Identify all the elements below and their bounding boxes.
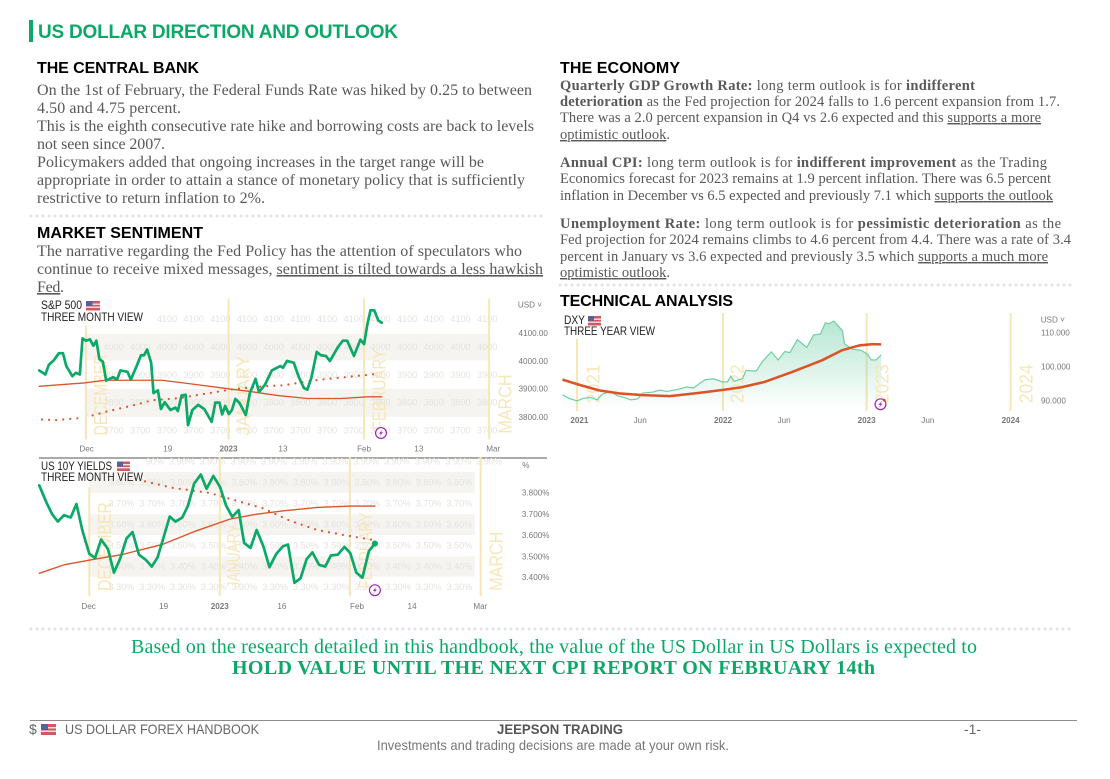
chart: US 10Y yields three month view: MARCH xyxy=(487,532,508,591)
text block: central bank xyxy=(37,82,534,207)
chart: S&P 500 three month view: Dec xyxy=(79,445,94,454)
chart: US 10Y yields three month view: Feb xyxy=(350,602,364,611)
chart: US 10Y yields three month view: 3.70% 3.70% 3.70% 3.70% 3.70% 3.70% 3.70% 3.70% 3.70% 3.70% 3.70% 3.70% xyxy=(109,498,472,508)
text block: quarterly GDP growth rate: optimistic outlook. xyxy=(560,127,670,143)
chart: US 10Y yields three month view: 16 xyxy=(277,602,287,611)
text block: unemployment rate: optimistic outlook. xyxy=(560,265,670,281)
callout: conclusion xyxy=(131,636,977,679)
label: S&P 500 three month view: THREE MONTH VIEW xyxy=(41,310,144,324)
chart: DXY three year view: 2024 xyxy=(1016,364,1037,403)
chart: S&P 500 three month view: 2023 xyxy=(220,445,238,454)
text block: central bank: Policymakers added that ongoing increases in the target range will be xyxy=(37,154,484,171)
label: US 10Y yields three month view: THREE MONTH VIEW xyxy=(41,470,144,484)
footer: $ xyxy=(29,721,37,737)
text block: central bank: restrictive to return inflation to 2%. xyxy=(37,190,265,207)
footer: -1- xyxy=(964,721,981,737)
text block: market sentiment xyxy=(37,243,543,296)
chart: US 10Y yields three month view: 3.400% xyxy=(522,573,549,582)
heading: market sentiment: MARKET SENTIMENT xyxy=(37,225,203,242)
text block: central bank: not seen since 2007. xyxy=(37,136,165,153)
chart: S&P 500 three month view: Feb xyxy=(357,445,372,454)
chart: US 10Y yields three month view: 90% 3.90% 3.90% 3.90% 3.90% 3.90% 3.90% 3.90% 3.90% 3.90% 3.90% 3.90% xyxy=(146,456,502,466)
chart: S&P 500 three month view: Mar xyxy=(486,445,500,454)
heading: the central bank: THE CENTRAL BANK xyxy=(37,60,199,77)
panel: market sentiment xyxy=(37,225,543,296)
panel: the economy xyxy=(560,60,1072,281)
chart: S&P 500 three month view: USD ˅ xyxy=(518,301,542,310)
chart: US 10Y yields three month view: 3.50% 3.50% 3.50% 3.50% 3.50% 3.50% 3.50% 3.50% 3.50% 3.50% 3.50% 3.50% xyxy=(109,541,472,551)
icon: US flag xyxy=(41,724,56,735)
chart: S&P 500 three month view: 4000 4000 4000 4000 4000 4000 4000 4000 4000 4000 4000 4000 4000 4000 4000 xyxy=(103,342,497,352)
chart: S&P 500 three month view: 4100.00 xyxy=(519,329,548,338)
chart: US 10Y yields three month view: Dec xyxy=(81,602,96,611)
chart: US 10Y yields three month view: 3.40% 3.40% 3.40% 3.40% 3.40% 3.40% 3.40% 3.40% 3.40% 3.40% 3.40% 3.40% xyxy=(109,562,472,572)
text block: market sentiment: Fed. xyxy=(37,279,64,296)
chart: DXY three year view: 2022 xyxy=(714,416,732,425)
chart: S&P 500 three month view: MARCH xyxy=(495,374,516,434)
chart: S&P 500 three month view: 3900.00 xyxy=(519,385,548,394)
chart: DXY three year view: USD ˅ xyxy=(1041,315,1065,324)
label: S&P 500 three month view: S&P 500 xyxy=(41,298,82,312)
text block: market sentiment: The narrative regarding the Fed Policy has the attention of speculators who xyxy=(37,243,522,260)
chart: DXY three year view: Jun xyxy=(634,416,647,425)
text block: central bank: On the 1st of February, the Federal Funds Rate was hiked by 0.25 to between xyxy=(37,82,532,99)
text block: central bank: This is the eighth consecutive rate hike and borrowing costs are back to levels xyxy=(37,118,534,135)
chart: US 10Y yields three month view: 3.700% xyxy=(522,510,549,519)
callout: conclusion: Based on the research detailed in this handbook, the value of the US Dollar in US Dollars is expected to xyxy=(131,636,977,658)
text block: quarterly GDP growth rate xyxy=(560,78,1060,143)
panel: technical analysis xyxy=(560,293,1071,425)
text block: market sentiment: continue to receive mixed messages, sentiment is tilted towards a less hawkish xyxy=(37,261,543,278)
footer: US DOLLAR FOREX HANDBOOK xyxy=(65,721,260,737)
text block: annual CPI xyxy=(560,155,1054,204)
chart: DXY three year view: 2021 xyxy=(570,416,589,425)
callout: conclusion: HOLD VALUE UNTIL THE NEXT CPI REPORT ON FEBRUARY 14th xyxy=(232,657,875,679)
chart: DXY three year view: 100.000 xyxy=(1041,362,1071,371)
chart: DXY three year view: Jun xyxy=(921,416,934,425)
chart: US 10Y yields three month view: 3.500% xyxy=(522,552,549,561)
text block: annual CPI: Economics forecast for 2023 remains at 1.9 percent inflation. There was 6.5 percent xyxy=(560,171,1051,187)
chart: DXY three year view: 90.000 xyxy=(1041,397,1066,406)
panel: the central bank xyxy=(37,60,534,207)
chart: S&P 500 three month view: 3700 3700 3700 3700 3700 3700 3700 3700 3700 3700 3700 3700 3700 3700 3700 xyxy=(103,426,497,436)
label: DXY three year view: DXY xyxy=(564,313,585,327)
chart: US 10Y yields three month view: 3.30% 3.30% 3.30% 3.30% 3.30% 3.30% 3.30% 3.30% 3.30% 3.30% 3.30% 3.30% xyxy=(109,582,472,592)
chart: DXY three year view: 2023 xyxy=(873,364,894,403)
chart: US 10Y yields three month view: DECEMBER xyxy=(95,502,116,591)
chart: S&P 500 three month view: 13 xyxy=(414,445,424,454)
text block: quarterly GDP growth rate: Quarterly GDP Growth Rate: long term outlook is for indifferent xyxy=(560,78,975,94)
text block: quarterly GDP growth rate: deterioration as the Fed projection for 2024 falls to 1.6 percent expansion from 1.7. xyxy=(560,94,1060,110)
chart: US 10Y yields three month view: FEBRUARY xyxy=(356,512,377,589)
chart: US 10Y yields three month view: Mar xyxy=(473,602,488,611)
chart: US 10Y yields three month view: 2023 xyxy=(211,602,229,611)
text block: unemployment rate: Unemployment Rate: long term outlook is for pessimistic deterioration as the xyxy=(560,216,1061,232)
heading: technical analysis: TECHNICAL ANALYSIS xyxy=(560,293,733,310)
chart: DXY three year view xyxy=(562,313,1071,425)
chart: S&P 500 three month view: 3800 3800 3800 3800 3800 3800 3800 3800 3800 3800 3800 3800 3800 3800 3800 xyxy=(103,398,497,408)
text block: central bank: appropriate in order to attain a stance of monetary policy that is sufficiently xyxy=(37,172,525,189)
chart: S&P 500 three month view: 4000.00 xyxy=(519,357,548,366)
chart: S&P 500 three month view xyxy=(39,298,548,454)
chart: US 10Y yields three month view: 19 xyxy=(159,602,169,611)
label: S&P 500 three month view xyxy=(41,298,144,324)
text block: unemployment rate: Fed projection for 2024 remains climbs to 4.6 percent from 4.4. There was a rate of 3.4 xyxy=(560,232,1072,248)
text block: central bank: 4.50 and 4.75 percent. xyxy=(37,100,181,117)
chart: S&P 500 three month view: DECEMBER xyxy=(91,354,112,435)
text block: unemployment rate xyxy=(560,216,1072,281)
footer: JEEPSON TRADING xyxy=(497,721,623,737)
chart: DXY three year view: 2024 xyxy=(1002,416,1020,425)
heading: the economy: THE ECONOMY xyxy=(560,60,680,77)
label: US 10Y yields three month view: US 10Y YIELDS xyxy=(41,459,112,473)
chart: US 10Y yields three month view: % xyxy=(522,461,529,470)
label: DXY three year view: THREE YEAR VIEW xyxy=(564,324,656,338)
chart: S&P 500 three month view: 13 xyxy=(278,445,288,454)
chart: US 10Y yields three month view: 3.800% xyxy=(522,489,549,498)
text block: annual CPI: Annual CPI: long term outlook is for indifferent improvement as the Trading xyxy=(560,155,1047,171)
chart: US 10Y yields three month view: 3.600% xyxy=(522,531,549,540)
label: US 10Y yields three month view xyxy=(41,459,144,484)
chart: DXY three year view: Jun xyxy=(778,416,791,425)
chart: S&P 500 three month view: JANUARY xyxy=(234,356,255,435)
chart: S&P 500 three month view: 3800.00 xyxy=(519,413,548,422)
chart: S&P 500 three month view: 3900 3900 3900 3900 3900 3900 3900 3900 3900 3900 3900 3900 3900 3900 3900 xyxy=(103,370,497,380)
chart: US 10Y yields three month view: JANUARY xyxy=(224,524,245,589)
chart: US 10Y yields three month view: 3.80% 3.80% 3.80% 3.80% 3.80% 3.80% 3.80% 3.80% 3.80% 3.80% 3.80% 3.80% xyxy=(109,477,472,487)
chart: S&P 500 three month view: 4100 4100 4100 4100 4100 4100 4100 4100 4100 4100 4100 4100 4100 xyxy=(157,314,497,324)
chart: DXY three year view: 2021 xyxy=(584,364,605,403)
chart: US 10Y yields three month view: 14 xyxy=(408,602,417,611)
footer: Investments and trading decisions are made at your own risk. xyxy=(377,737,729,753)
chart: DXY three year view: 110.000 xyxy=(1041,328,1070,337)
text block: unemployment rate: percent in January vs 3.6 expected and previously 3.5 which supports a much more xyxy=(560,249,1048,265)
chart: S&P 500 three month view: 19 xyxy=(163,445,173,454)
text block: annual CPI: inflation in December vs 6.5 expected and previously 7.1 which supports the outlook xyxy=(560,188,1054,204)
chart: US 10Y yields three month view xyxy=(39,456,549,611)
footer xyxy=(29,720,1077,753)
label: DXY three year view xyxy=(564,313,656,338)
chart: S&P 500 three month view: FEBRUARY xyxy=(370,349,391,430)
chart: DXY three year view: 2023 xyxy=(858,416,876,425)
chart: DXY three year view: 2022 xyxy=(727,364,748,403)
title: US DOLLAR DIRECTION AND OUTLOOK xyxy=(38,22,398,43)
chart: US 10Y yields three month view: 3.60% 3.60% 3.60% 3.60% 3.60% 3.60% 3.60% 3.60% 3.60% 3.60% 3.60% 3.60% xyxy=(109,520,472,530)
text block: quarterly GDP growth rate: There was a 2.0 percent expansion in Q4 vs 2.6 expected and this supports a more xyxy=(560,110,1041,126)
